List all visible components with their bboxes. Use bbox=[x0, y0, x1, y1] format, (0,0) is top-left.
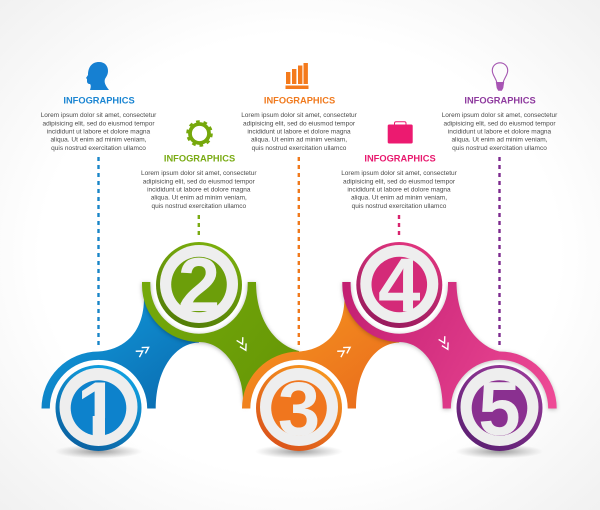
body text 5: incididunt ut labore et dolore magna bbox=[448, 129, 552, 136]
band: blue arc around circle 1 bbox=[42, 295, 199, 408]
arrows on bands bbox=[136, 336, 451, 357]
dashed connector lines bbox=[98, 157, 500, 347]
circle 1 bbox=[56, 365, 142, 452]
circle 3: 3 bbox=[278, 367, 320, 452]
body text 2: Lorem ipsum dolor sit amet, consectetur bbox=[141, 170, 257, 177]
body text 1: incididunt ut labore et dolore magna bbox=[47, 129, 151, 136]
column 2: icon, heading and text bbox=[141, 122, 257, 210]
circle 4: 4 bbox=[378, 243, 420, 328]
body text 1: quis nostrud exercitation ullamco bbox=[51, 145, 146, 152]
body text 1: adipisicing elit, sed do eiusmod tempor bbox=[42, 120, 155, 127]
arrow: green band bbox=[237, 337, 249, 352]
arrow: orange band bbox=[337, 344, 352, 357]
body text 4: adipisicing elit, sed do eiusmod tempor bbox=[343, 178, 456, 185]
body text 5: adipisicing elit, sed do eiusmod tempor bbox=[443, 120, 556, 127]
heading 3: INFOGRAPHICS bbox=[264, 96, 335, 106]
body text 5 bbox=[442, 112, 558, 152]
circle 2: 2 bbox=[178, 243, 220, 328]
heading 5: INFOGRAPHICS bbox=[464, 96, 536, 106]
icon: bar chart bbox=[286, 63, 308, 89]
heading 4: INFOGRAPHICS bbox=[364, 154, 436, 164]
icon: head bbox=[86, 62, 109, 90]
heading 1: INFOGRAPHICS bbox=[63, 96, 135, 106]
body text 5: aliqua. Ut enim ad minim veniam, bbox=[451, 137, 548, 144]
body text 3: quis nostrud exercitation ullamco bbox=[252, 145, 347, 152]
arrow: blue band bbox=[136, 344, 150, 357]
arrow: pink band bbox=[439, 336, 451, 351]
column 4: icon, heading and text bbox=[341, 122, 458, 210]
icon: briefcase bbox=[388, 122, 413, 144]
circle 2 bbox=[156, 242, 242, 328]
circle 3 bbox=[256, 365, 342, 452]
body text 3: Lorem ipsum dolor sit amet, consectetur bbox=[241, 112, 358, 119]
body text 3: adipisicing elit, sed do eiusmod tempor bbox=[243, 120, 356, 127]
circle 5 bbox=[456, 365, 542, 452]
column 3: icon, heading and text bbox=[241, 63, 358, 152]
body text 2: aliqua. Ut enim ad minim veniam, bbox=[151, 195, 247, 202]
body text 3: aliqua. Ut enim ad minim veniam, bbox=[251, 137, 347, 144]
body text 1: aliqua. Ut enim ad minim veniam, bbox=[50, 137, 147, 144]
body text 2: incididunt ut labore et dolore magna bbox=[147, 187, 251, 194]
body text 3 bbox=[241, 112, 358, 152]
body text 1: Lorem ipsum dolor sit amet, consectetur bbox=[41, 112, 157, 119]
body text 5: quis nostrud exercitation ullamco bbox=[452, 145, 547, 152]
icon: gear bbox=[188, 122, 211, 145]
body text 2: quis nostrud exercitation ullamco bbox=[151, 203, 247, 210]
floor shadows under circles bbox=[54, 444, 544, 458]
heading 2: INFOGRAPHICS bbox=[164, 154, 235, 164]
body text 4 bbox=[341, 170, 458, 210]
column 5: icon, heading and text bbox=[442, 63, 558, 152]
body text 2 bbox=[141, 170, 257, 210]
band: orange arc around circle 3 bbox=[242, 295, 399, 408]
body text 5: Lorem ipsum dolor sit amet, consectetur bbox=[442, 112, 558, 119]
body text 4: aliqua. Ut enim ad minim veniam, bbox=[351, 195, 447, 202]
circle 4 bbox=[356, 242, 442, 328]
circle 5: 5 bbox=[478, 367, 521, 452]
column 1: icon, heading and text bbox=[41, 62, 157, 152]
body text 4: incididunt ut labore et dolore magna bbox=[347, 187, 451, 194]
body text 2: adipisicing elit, sed do eiusmod tempor bbox=[143, 178, 256, 185]
icon: light bulb bbox=[492, 63, 508, 91]
body text 1 bbox=[41, 112, 157, 152]
body text 4: Lorem ipsum dolor sit amet, consectetur bbox=[341, 170, 458, 177]
body text 4: quis nostrud exercitation ullamco bbox=[352, 203, 447, 210]
circle 1: 1 bbox=[77, 367, 119, 452]
band: pink arc around circles 4 and 5 bbox=[342, 282, 557, 408]
body text 3: incididunt ut labore et dolore magna bbox=[247, 129, 351, 136]
band: green arc around circle 2 bbox=[142, 282, 299, 408]
